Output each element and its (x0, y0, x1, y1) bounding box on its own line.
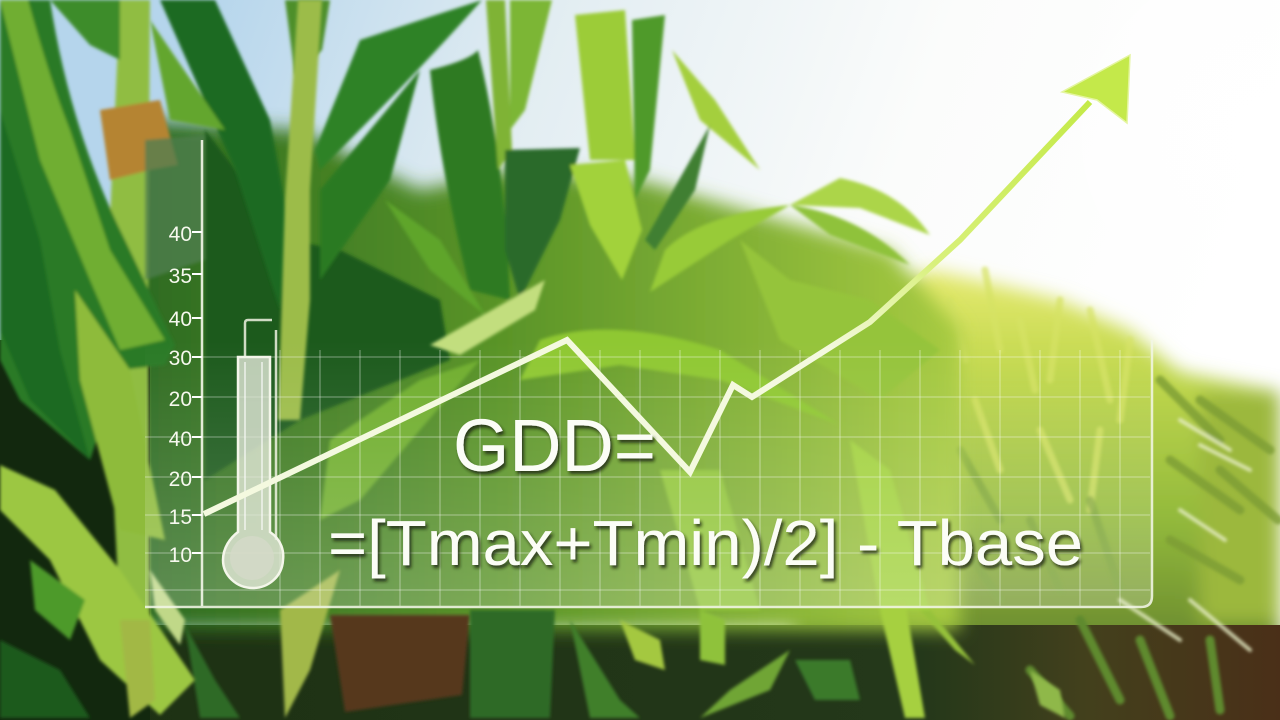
y axis labels: 40 (169, 428, 192, 451)
leaves: stalks and foreground (0, 0, 322, 718)
formula: GDD heading: GDD= (453, 404, 656, 487)
y axis ticks (192, 232, 202, 553)
field texture: distant corn leaves (950, 270, 1278, 716)
background: dark inner canopy (205, 130, 470, 712)
y axis labels: 35 (169, 265, 192, 288)
y axis labels (169, 223, 192, 567)
chart grid lines (145, 350, 1150, 606)
arrowhead (1062, 55, 1130, 123)
y axis labels: 30 (169, 347, 192, 370)
y axis labels: 40 (169, 223, 192, 246)
background: corn canopy mass (130, 120, 960, 630)
background: distant corn field (780, 270, 1280, 720)
chart: rising trend line with arrow (204, 55, 1130, 514)
formula: calculation: =[Tmax+Tmin)/2] - Tbase (328, 507, 1083, 579)
y axis labels: 20 (169, 388, 192, 411)
background: dark left undergrowth (0, 340, 150, 720)
panel border (145, 340, 1152, 607)
background: ground strip (0, 625, 1280, 720)
y axis labels: 15 (169, 506, 192, 529)
sun glow (780, 0, 1280, 460)
y axis line (201, 140, 203, 606)
y axis labels: 20 (169, 468, 192, 491)
icon: thermometer (223, 320, 283, 588)
leaves: upper centre (150, 0, 1065, 718)
y axis labels: 40 (169, 308, 192, 331)
panel: glass chart panel (145, 140, 1153, 608)
y axis labels: 10 (169, 544, 192, 567)
